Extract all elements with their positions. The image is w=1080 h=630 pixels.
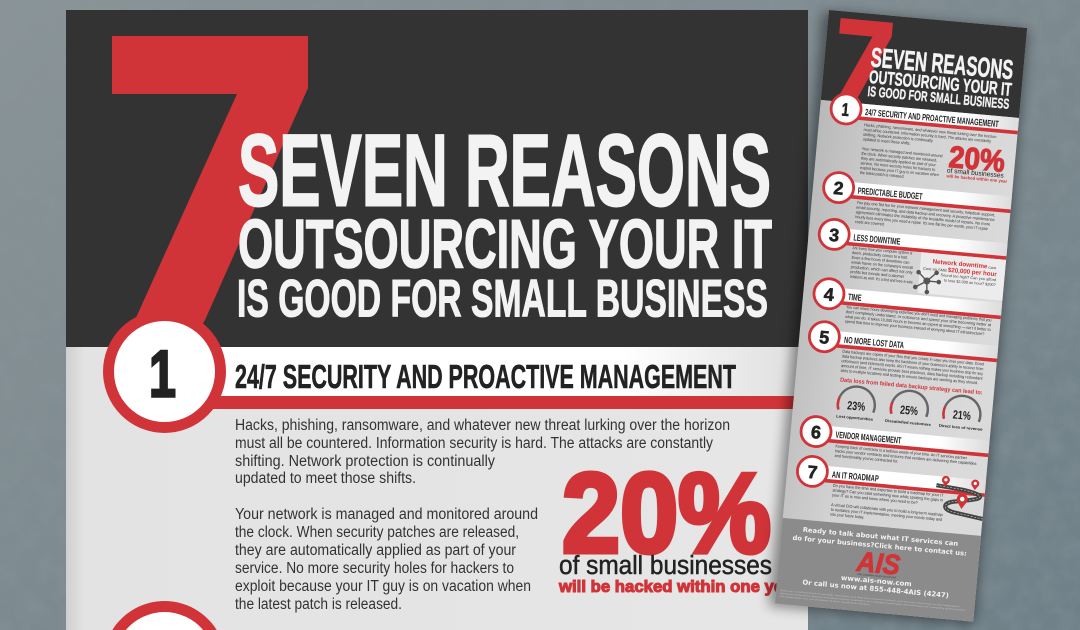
sheet section 1: will be hacked within one year <box>945 173 1008 184</box>
sheet section 6: vendor management: Keeping track of contracts is a tedious waste of your time. An IT services partner <box>835 443 968 460</box>
sheet section 4: time <box>811 277 1003 338</box>
heading: data loss: Data loss from failed data backup strategy can lead to: <box>840 378 983 396</box>
gauge: lost opportunities <box>836 385 876 422</box>
sheet section 5: no more lost data: amount of time. IT services provide best practices, data backup including redundant <box>841 363 984 381</box>
sheet section 3: less downtime <box>815 218 1008 301</box>
sheet section 3: less downtime: wreak havoc on the company's overall <box>851 259 913 270</box>
sheet section 1: 24/7 SECURITY AND PROACTIVE MANAGEMENT <box>865 107 999 129</box>
logo: AIS: ONE COMPANY. MANY SOLUTIONS. <box>857 573 897 580</box>
gauge: direct loss of revenue <box>939 394 985 432</box>
sheet section 1: of small businesses <box>947 168 1004 180</box>
title: OUTSOURCING YOUR IT <box>238 206 772 282</box>
sheet section 5: no more lost data: Data backups are copies of your files that you create in case you lose your data. Good <box>842 349 985 367</box>
sheet section 5: no more lost data: sites to multiple locations and testing to ensure backups are working as they should. <box>840 368 978 385</box>
sheet section 7: an IT roadmap: Do you have the time and expertise to build a roadmap for your IT <box>833 483 944 498</box>
sheet section 7: an IT roadmap: your IT as is now and know where you need to be? <box>832 492 919 505</box>
body text: security intro: updated to meet those shifts. <box>235 470 416 487</box>
body text: managed network <box>235 506 538 613</box>
body text: managed network: the latest patch is released. <box>235 596 402 613</box>
sheet section 1: shifting. Network protection is continually <box>863 132 934 143</box>
sheet footer call to action: do for your business?Click here to contact us: <box>792 534 967 558</box>
body text: security intro <box>235 417 730 487</box>
callout: network downtime cost: Cost an SMB <box>923 267 948 273</box>
section 1 header band <box>200 347 808 409</box>
sheet section 6: vendor management: VENDOR MANAGEMENT <box>835 430 902 446</box>
callout: network downtime cost: to lose $2,000 an hour? $200? <box>944 278 997 287</box>
gauge: direct loss of revenue: Direct loss of revenue <box>939 424 983 432</box>
panel: small full infographic sheet <box>775 10 1027 622</box>
sheet footer call to action: www.ais-now.com <box>841 574 912 588</box>
callout: 20% statistic: of small businesses <box>559 552 772 580</box>
number badge 1: 1 <box>149 336 176 410</box>
gauge: direct loss of revenue: 21% <box>952 407 972 423</box>
sheet section 3: less downtime: Are every hour your computer system is <box>852 245 913 256</box>
gauge: dissatisfied customers: Dissatisfied customers <box>885 419 931 427</box>
body text: managed network: the clock. When security patches are released, <box>235 524 519 541</box>
sheet section 1 <box>825 93 1020 189</box>
sheet footer call to action: Ready to talk about what IT services can <box>802 526 959 548</box>
number badge 1 <box>108 316 220 428</box>
callout: 20% statistic: will be hacked within one year <box>558 577 799 596</box>
sheet section 1: service. No more security holes for hackers to <box>860 160 936 172</box>
disclaimer fine print: Sources: small business IT security, downtime and data loss research reports and surveys referenced in this infographic <box>780 589 960 608</box>
sheet section 3: less downtime: profits but morale and customer <box>850 269 905 279</box>
gauge: dissatisfied customers <box>885 389 934 427</box>
sheet section 7: an IT roadmap: into your future today. <box>830 512 865 520</box>
sheet section 5: no more lost data: unforeseen (and inclement) events. AIS IT means nothing makes your business stop for any <box>841 358 984 376</box>
sheet section 2: predictable budget: You pay one flat fee for your network management and security, helpdesk support, <box>856 200 995 217</box>
sheet section 1: exploit because your IT guy is on vacation when <box>860 165 940 177</box>
sheet section 2: predictable budget: PREDICTABLE BUDGET <box>857 186 923 202</box>
sheet footer call to action <box>775 518 981 622</box>
callout: 20% statistic: 20% <box>562 450 771 576</box>
sheet section 7: an IT roadmap: strategy? Can you start something new while spotting the gaps in <box>832 488 944 503</box>
sheet section 1: Hacks, phishing, ransomware, and whatever new threat lurking over the horizon <box>864 122 997 139</box>
callout: network downtime cost: can <box>988 266 996 270</box>
shadow of the small infographic sheet <box>769 11 1028 625</box>
sheet section 3: less downtime: down, productivity comes to a halt. <box>852 250 908 260</box>
sheet section 7: an IT roadmap: to revitalize your IT implementation, meeting your needs today and <box>831 507 943 522</box>
sheet section 7: an IT roadmap: A virtual CIO will collaborate with you to build a long-term roadmap <box>831 502 944 517</box>
number badge 2 (cropped) <box>112 601 217 630</box>
sheet section 4: time: don't completely understand, or outsource and spend your time becoming better at <box>846 309 992 327</box>
title: IS GOOD FOR SMALL BUSINESS <box>237 270 768 328</box>
sheet section 4: time: what you do. It takes 10,000 hours to become an expert at something — isn't it better to <box>845 314 992 332</box>
sheet section 4: time: You can waste hours developing expertise you don't need and managing problems that you <box>846 304 992 322</box>
sheet section 3: less downtime: 3 <box>828 225 840 246</box>
sheet section 1: Your network is managed and monitored around <box>862 146 943 158</box>
sheet section 1: updated to meet those shifts. <box>863 136 911 146</box>
gauge: dissatisfied customers: 25% <box>899 403 919 418</box>
body text: managed network: exploit because your IT guy is on vacation when <box>235 578 531 595</box>
body text: security intro: Hacks, phishing, ransomware, and whatever new threat lurking over the horizon <box>235 417 730 434</box>
sheet section 2: predictable budget <box>821 171 1013 238</box>
callout: network downtime cost: Sound too high? Can you afford <box>940 272 996 282</box>
sheet section 2: predictable budget: agreement eliminates the instability of the break/fix model of repairs. No more <box>856 209 991 227</box>
disclaimer fine print <box>780 589 966 615</box>
logo: AIS: AIS <box>855 546 902 581</box>
sheet section 2: predictable budget: email security, reporting, and data backup and recovery. A proactive maintenance <box>856 205 996 222</box>
sheet section 7: an IT roadmap <box>794 455 987 530</box>
sheet section 3: less downtime: production, which can affect not only <box>851 264 914 275</box>
sheet section 4: time: TIME <box>848 292 862 303</box>
callout: network downtime cost: $20,000 per hour <box>948 267 997 278</box>
sheet section 7: an IT roadmap: AN IT ROADMAP <box>831 469 879 484</box>
section 1 header band: 24/7 SECURITY AND PROACTIVE MANAGEMENT <box>235 358 736 395</box>
sheet section 6: vendor management: tracks your vendor contracts and ensures that vendors are delivering their capabilities <box>835 448 977 466</box>
sheet footer call to action: Or call us now at 855-448-4AIS (4247) <box>802 578 949 600</box>
sheet section 6: vendor management: and functionality you've contracted for. <box>834 453 899 464</box>
sheet section 5: no more lost data: data backup practices also keep the backbone of your business's ability to recover from <box>842 353 984 371</box>
panel: main enlarged infographic <box>66 10 808 630</box>
sheet section 2: predictable budget: costs are covered. <box>855 219 885 227</box>
sheet section 1: the latest patch is released. <box>859 170 905 179</box>
title <box>237 114 772 328</box>
callout: network downtime cost: Network downtime <box>932 258 988 270</box>
disclaimer fine print: Network downtime figures and data backup statistics are industry estimates and will vary by company and location <box>780 592 965 612</box>
icon: network hub <box>913 269 941 295</box>
sheet section 2: predictable budget: hourly fees every time you need a repair. It's one flat fee per month, your IT repair <box>855 214 989 231</box>
sheet section 3: less downtime: relations as well. It's a lost and lose-a-sale. <box>850 274 914 285</box>
sheet header with 7 and title <box>833 18 1017 117</box>
icon: winding road with map pins <box>934 475 986 519</box>
callout: network downtime cost <box>918 252 1006 301</box>
sheet section 7: an IT roadmap: 7 <box>806 462 818 483</box>
big red numeral 7 <box>112 36 308 345</box>
sheet section 3: less downtime: Even a few hours of downtime can <box>851 255 910 265</box>
disclaimer fine print: All trademarks are the property of their respective owners <box>780 595 869 606</box>
body text: managed network: they are automatically applied as part of your <box>235 542 516 559</box>
sheet section 1: they are automatically applied as part of your <box>861 156 937 167</box>
sheet section 3: less downtime: LESS DOWNTIME <box>853 232 901 247</box>
sheet section 1: the clock. When security patches are released, <box>861 151 937 163</box>
sheet section 4: time: spend that time to improve your business instead of worrying about IT infrastructure? <box>845 319 985 336</box>
sheet section 5: no more lost data: 5 <box>818 327 830 348</box>
sheet section 4: time: 4 <box>823 284 835 305</box>
gauge: lost opportunities: Lost opportunities <box>836 414 873 422</box>
sheet section 2: predictable budget: 2 <box>833 178 844 199</box>
sheet section 5: no more lost data <box>802 320 999 432</box>
sheet section 6: vendor management <box>799 415 990 472</box>
sheet section 5: no more lost data: NO MORE LOST DATA <box>844 335 905 350</box>
body text: managed network: Your network is managed and monitored around <box>235 506 538 523</box>
body text: security intro: shifting. Network protection is continually <box>235 453 495 470</box>
body text: managed network: service. No more security holes for hackers to <box>235 560 514 577</box>
gauge: lost opportunities: 23% <box>847 398 866 414</box>
sheet section 6: vendor management: 6 <box>810 422 822 443</box>
body text: security intro: must all be countered. Information security is hard. The attacks are constantly <box>235 435 713 452</box>
sheet section 1: 1 <box>841 99 850 120</box>
sheet section 1: must all be countered. Information security is hard. The attacks are constantly <box>863 127 992 144</box>
sheet section 1: 20% <box>947 140 1006 179</box>
